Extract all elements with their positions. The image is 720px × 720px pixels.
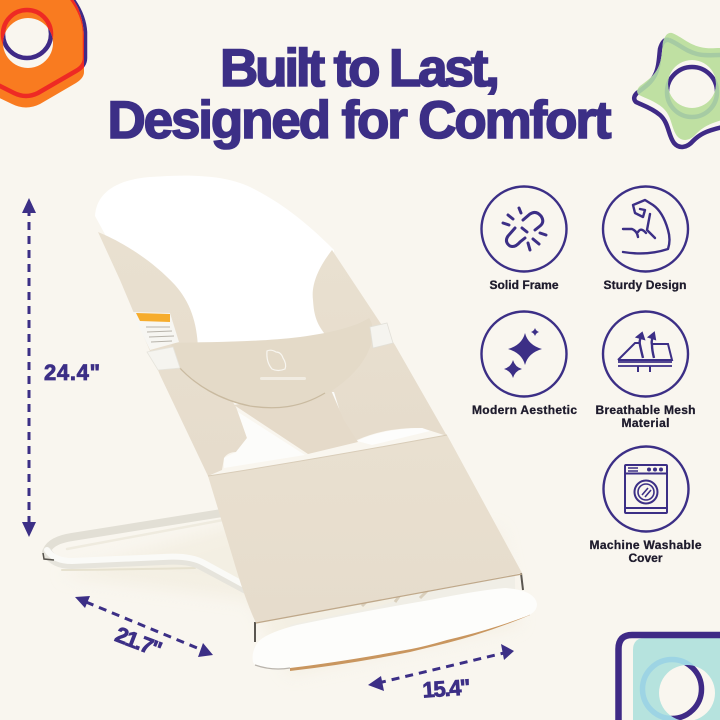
feature: sturdy design [603,186,688,292]
warning label [132,312,179,350]
icon: flexed bicep [603,186,688,272]
inner frame under pocket [290,575,515,636]
height dimension arrow [22,198,36,537]
title [108,39,612,150]
feature: machine washable cover [590,446,702,565]
feature: breathable mesh material [596,312,696,430]
label [590,538,702,565]
lower pocket [208,435,522,623]
title: Designed for Comfort [108,91,612,150]
metal frame tubes [47,513,248,590]
height value: 24.4" [44,360,100,385]
floor shadow [60,525,520,675]
label: Solid Frame [490,278,559,292]
white gaps under strap [224,412,305,468]
title: Built to Last, [220,39,500,98]
bouncer chair product [43,176,537,675]
footrest base [253,588,537,671]
label: Breathable Mesh [596,403,696,417]
icon: mesh with air arrows [603,312,688,396]
depth dimension arrow [75,596,213,657]
head pad [171,318,373,407]
label [596,403,696,430]
white mesh back [95,176,334,360]
feature: modern aesthetic [472,312,577,417]
decoration: teal rounded square [618,635,720,720]
logo on head pad [260,350,306,380]
label: Modern Aesthetic [472,403,577,417]
decoration: green star gear [634,33,720,147]
decoration: orange hexagon nut [0,0,85,108]
label: Sturdy Design [604,278,686,292]
icon: washing machine [604,446,688,532]
icon: broken link [482,186,566,272]
label: Material [622,416,670,430]
left fabric side [98,232,247,476]
label: Machine Washable [590,538,702,552]
white strap right [370,323,393,348]
crotch strap [234,388,358,454]
depth value: 21.7" [112,622,166,662]
width value: 15.4" [422,674,471,703]
white strap left [147,347,180,370]
right fabric side [313,250,447,440]
width dimension arrow [368,644,514,691]
metal legs [255,573,523,642]
icon: sparkles [482,312,566,396]
label: Cover [628,551,663,565]
feature: solid frame [482,186,566,292]
